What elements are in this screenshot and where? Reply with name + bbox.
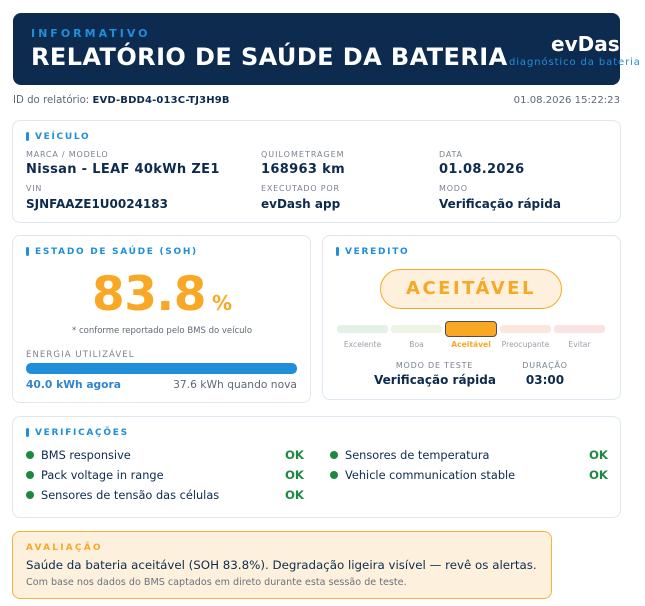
check: temperature sensors — [330, 448, 608, 462]
section marker — [26, 247, 29, 256]
VIN: SJNFAAZE1U0024183 — [26, 197, 168, 211]
duration: DURAÇÃO — [522, 361, 568, 370]
nominal energy: 37.6 kWh quando nova — [173, 378, 297, 391]
mode — [439, 184, 561, 211]
heading: vehicle: VEÍCULO — [35, 132, 90, 142]
mileage: 168963 km — [261, 162, 345, 177]
check: BMS responsive: OK — [285, 448, 304, 462]
segment: concerning — [500, 325, 551, 333]
segment: avoid — [554, 325, 605, 333]
label: excellent: Excelente — [344, 340, 381, 349]
check: pack voltage — [26, 468, 304, 482]
executed by — [261, 184, 340, 211]
check: pack voltage: OK — [285, 468, 304, 482]
usable energy bar — [26, 363, 297, 374]
heading: checks: VERIFICAÇÕES — [35, 428, 129, 438]
section marker — [26, 428, 29, 437]
brand name: evDash — [551, 32, 634, 56]
make and model: Nissan - LEAF 40kWh ZE1 — [26, 162, 220, 177]
check: BMS responsive — [26, 448, 304, 462]
test mode — [374, 361, 496, 387]
duration: 03:00 — [526, 373, 564, 387]
check: vehicle communication: Vehicle communication stable — [345, 468, 515, 482]
panel: verdict — [322, 235, 621, 400]
date: DATA — [439, 150, 463, 159]
check: temperature sensors: OK — [589, 448, 608, 462]
mileage: QUILOMETRAGEM — [261, 150, 345, 159]
current energy: 40.0 kWh agora — [26, 378, 121, 391]
verdict badge: ACEITÁVEL — [406, 278, 536, 299]
panel: state of health — [12, 235, 311, 403]
brand tagline: diagnóstico da bateria — [509, 57, 641, 68]
panel: checks — [12, 416, 621, 518]
section marker — [26, 132, 29, 141]
test mode: MODO DE TESTE — [396, 361, 473, 370]
panel: vehicle — [12, 120, 621, 223]
date: 01.08.2026 — [439, 162, 525, 177]
make and model — [26, 150, 220, 177]
report timestamp: 01.08.2026 15:22:23 — [514, 95, 620, 106]
check: cell voltage sensors: OK — [285, 488, 304, 502]
duration — [522, 360, 568, 387]
BMS note: * conforme reportado pelo BMS do veículo — [72, 326, 252, 336]
check: BMS responsive: BMS responsive — [41, 448, 131, 462]
executed by: evDash app — [261, 197, 340, 211]
date — [439, 150, 525, 177]
assessment text: Saúde da bateria aceitável (SOH 83.8%). Degradação ligeira visível — revê os alertas. — [26, 558, 537, 572]
check: cell voltage sensors: Sensores de tensão das células — [41, 488, 219, 502]
verdict badge — [380, 269, 562, 309]
label: avoid: Evitar — [568, 340, 591, 349]
check: cell voltage sensors — [26, 488, 304, 502]
heading: state of health: ESTADO DE SAÚDE (SOH) — [35, 247, 198, 257]
usable energy label: ENERGIA UTILIZÁVEL — [26, 350, 135, 360]
label: good: Boa — [409, 340, 424, 349]
label: acceptable: Aceitável — [451, 340, 491, 349]
heading: verdict: VEREDITO — [345, 247, 409, 257]
check: vehicle communication: OK — [589, 468, 608, 482]
SOH value: 83.8 % — [92, 267, 232, 322]
make and model: MARCA / MODELO — [26, 150, 108, 159]
mode: Verificação rápida — [439, 197, 561, 211]
report id: ID do relatório: EVD-BDD4-013C-TJ3H9B — [13, 95, 230, 106]
check: temperature sensors: Sensores de temperatura — [345, 448, 489, 462]
VIN — [26, 184, 168, 211]
title: RELATÓRIO DE SAÚDE DA BATERIA — [31, 43, 508, 71]
test mode: Verificação rápida — [374, 373, 496, 387]
segment: acceptable (active) — [445, 321, 497, 337]
assessment note: Com base nos dados do BMS captados em direto durante esta sessão de teste. — [26, 577, 407, 588]
VIN: VIN — [26, 184, 42, 193]
rating scale — [337, 320, 606, 352]
check: vehicle communication — [330, 468, 608, 482]
header label: INFORMATIVO — [31, 27, 151, 40]
label: concerning: Preocupante — [502, 340, 549, 349]
panel: assessment — [12, 531, 552, 599]
segment: excellent — [337, 325, 388, 333]
executed by: EXECUTADO POR — [261, 184, 340, 193]
check: pack voltage: Pack voltage in range — [41, 468, 164, 482]
segment: good — [391, 325, 442, 333]
header banner — [13, 13, 620, 85]
section marker — [336, 247, 339, 256]
mileage — [261, 150, 345, 177]
mode: MODO — [439, 184, 468, 193]
heading: assessment: AVALIAÇÃO — [26, 543, 103, 553]
